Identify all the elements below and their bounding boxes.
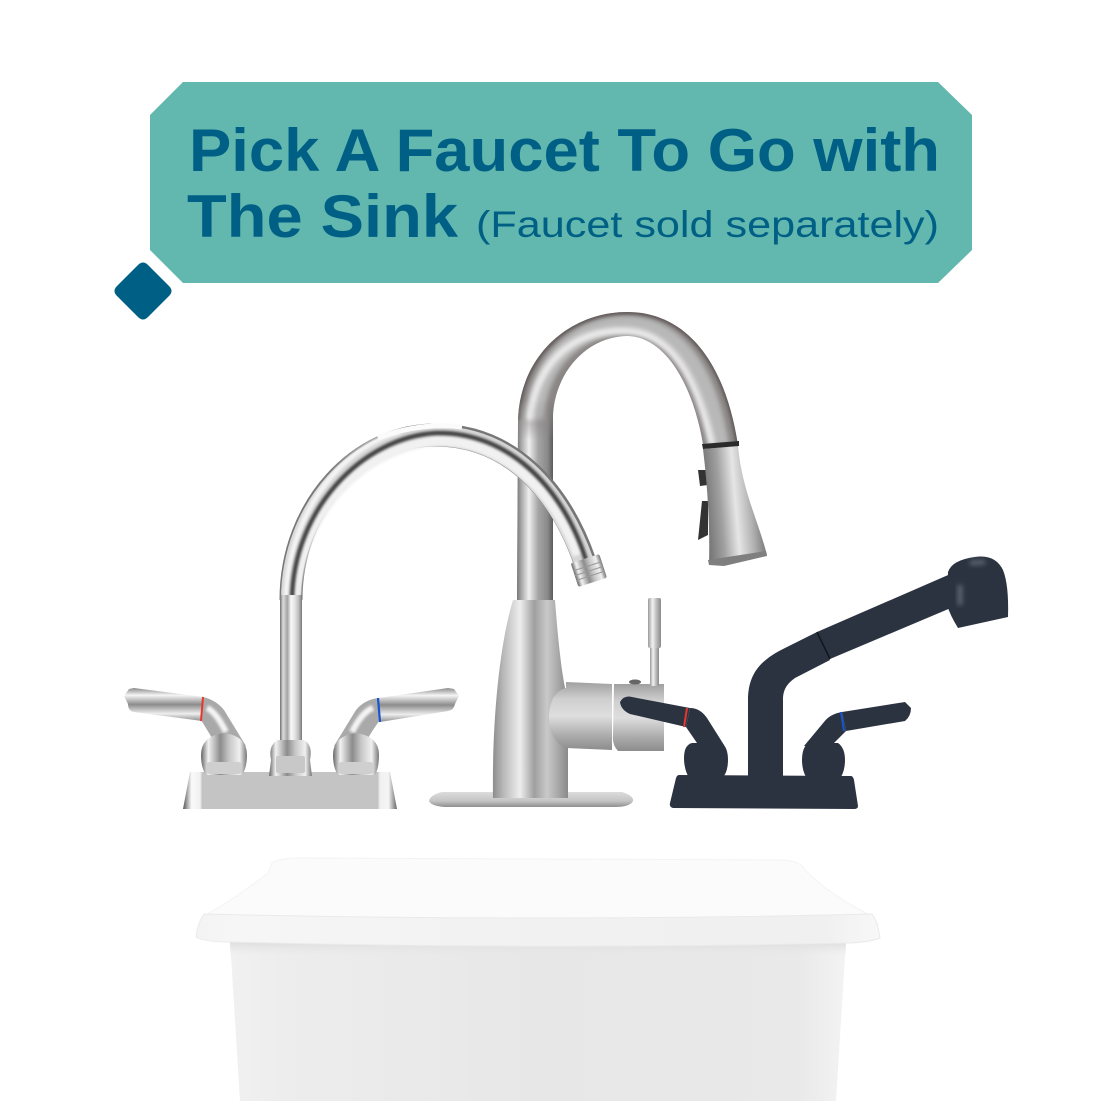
icon: diamond [114, 262, 172, 320]
left neck highlight [207, 708, 226, 732]
black left handle [620, 697, 728, 776]
faucet: chrome gooseneck [124, 426, 607, 809]
right knob [802, 743, 845, 777]
wand seam [817, 632, 830, 659]
right knob [333, 733, 379, 775]
chrome deck base [183, 772, 397, 809]
right neck [804, 712, 846, 746]
sprayer head [703, 446, 767, 565]
hot marker [201, 697, 203, 721]
chrome aerator [571, 554, 607, 587]
side handle barrel [549, 682, 612, 750]
black pull-out wand [817, 572, 965, 659]
lever screw [629, 680, 641, 684]
left neck [686, 708, 724, 745]
head highlight [960, 562, 985, 605]
chrome spout [286, 426, 586, 600]
black deck base [670, 775, 858, 809]
black right handle [802, 702, 911, 777]
right knob shine [338, 762, 374, 774]
tapered base [493, 600, 568, 798]
right neck highlight [352, 708, 373, 732]
lever lower rod [650, 648, 659, 686]
left lever [124, 688, 204, 721]
sprayer collar [702, 441, 739, 449]
banner panel [150, 82, 972, 283]
lever upper rod [648, 598, 661, 648]
chrome stem [280, 595, 302, 745]
sink lip shadow [230, 942, 846, 956]
subheading: (Faucet sold separately) [476, 204, 939, 245]
left knob [684, 743, 728, 776]
deck plate [429, 792, 633, 807]
faucet: matte black pull-out [620, 557, 1008, 809]
side handle cap [613, 684, 664, 751]
sink front lip [196, 914, 880, 946]
sink top rim [200, 858, 878, 925]
left neck [201, 697, 246, 746]
left handle [124, 688, 247, 775]
black spout base [748, 632, 830, 778]
right neck [334, 698, 380, 746]
sprayer button [698, 470, 708, 486]
sprayer nozzle [708, 551, 767, 566]
cold marker [841, 712, 844, 731]
centre escutcheon [269, 740, 312, 776]
hot marker [684, 708, 687, 727]
gooseneck spout [516, 312, 738, 605]
sink body [230, 940, 846, 1101]
sprayer toggle [698, 501, 708, 540]
black spray head [947, 557, 1008, 628]
cold marker [378, 698, 380, 722]
right handle [333, 688, 459, 775]
escutcheon flat [276, 756, 305, 773]
right lever [842, 702, 911, 731]
heading line 2: The Sink [187, 183, 459, 250]
faucet: brushed nickel pull-down [429, 312, 767, 807]
heading line 1: Pick A Faucet To Go with [189, 117, 940, 184]
right lever [378, 688, 459, 722]
left lever [620, 697, 690, 727]
left knob shine [206, 762, 242, 774]
left knob [201, 733, 247, 775]
sink [196, 858, 880, 1101]
